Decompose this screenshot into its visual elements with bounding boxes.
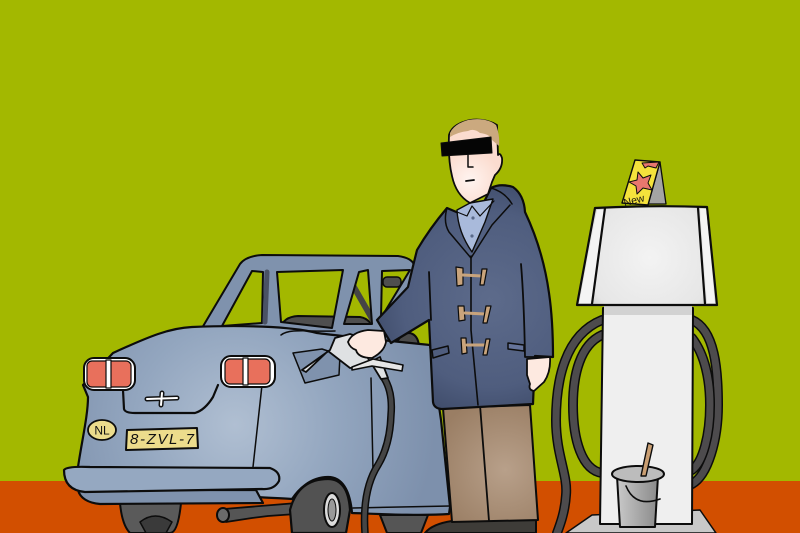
promo sign: New — [622, 192, 646, 209]
fuel nozzle with hand — [302, 330, 403, 379]
centre seam — [471, 256, 478, 405]
collar and lapels — [445, 188, 512, 258]
right hand — [527, 357, 550, 391]
license plate — [126, 428, 198, 450]
country sticker: NL — [94, 424, 110, 438]
fuel door — [293, 349, 340, 383]
hair — [450, 119, 499, 146]
nozzle spout — [302, 334, 388, 379]
exhaust — [217, 503, 297, 522]
car badge — [147, 393, 177, 405]
wheel: rear right — [290, 479, 350, 533]
car — [64, 255, 450, 533]
tail light right — [221, 356, 275, 387]
toggle row 2 — [458, 306, 491, 323]
wheel: rear left — [120, 503, 181, 533]
bumper — [64, 467, 279, 492]
fuel pump — [556, 160, 718, 533]
seat back behind door — [396, 333, 419, 346]
trunk lid — [123, 385, 218, 413]
wheel: front — [380, 515, 428, 533]
badge highlight — [147, 393, 177, 405]
roof and window frames — [202, 255, 414, 345]
seat headrest seen through window — [281, 316, 375, 334]
hand — [348, 330, 386, 358]
toggle row 3 — [461, 338, 490, 355]
trousers — [443, 405, 538, 522]
nozzle trigger — [352, 359, 403, 371]
strut seen through window — [343, 268, 374, 322]
mirror — [383, 277, 401, 287]
lampshade top — [577, 206, 717, 305]
promo sign — [622, 160, 666, 209]
pocket left — [432, 346, 449, 358]
shirt collar line — [457, 201, 494, 216]
man — [377, 119, 553, 533]
country sticker — [88, 420, 116, 440]
hose core — [365, 378, 391, 533]
sleeve seams — [429, 264, 553, 357]
black eye bar — [441, 137, 492, 156]
toggle row 1 — [456, 267, 487, 286]
shoes — [425, 520, 536, 533]
column shadow — [604, 306, 692, 315]
shirt — [457, 199, 493, 252]
base slab — [566, 510, 716, 533]
mouth — [466, 180, 474, 181]
column — [600, 308, 693, 524]
pocket right — [508, 343, 524, 351]
head — [441, 119, 502, 203]
tail light left — [84, 358, 135, 390]
bucket — [612, 443, 664, 527]
door seams — [253, 331, 450, 508]
body shell — [78, 326, 450, 515]
dark frame post — [265, 272, 267, 322]
license plate: 8-ZVL-7 — [130, 431, 195, 448]
shirt buttons — [470, 216, 475, 238]
ground — [0, 481, 800, 533]
hoses — [556, 320, 718, 533]
coat — [377, 185, 553, 409]
fuel hose — [365, 378, 391, 533]
nose — [468, 155, 473, 167]
lower valance — [78, 490, 263, 504]
